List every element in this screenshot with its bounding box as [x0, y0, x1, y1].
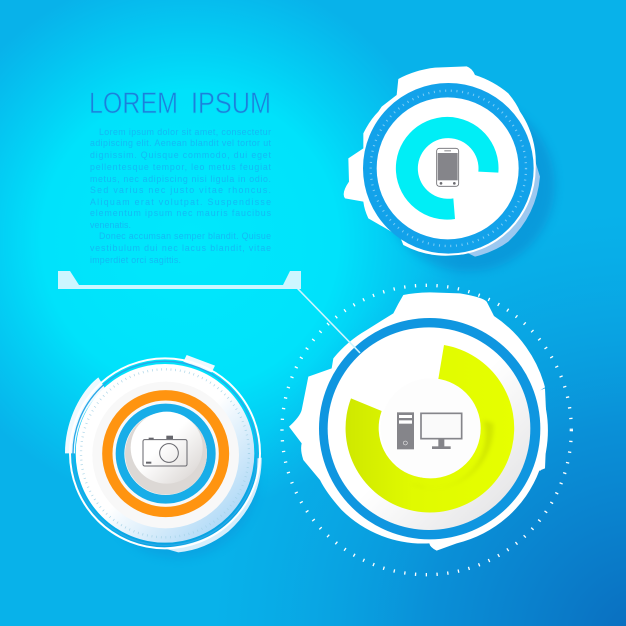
- green arc: [346, 345, 514, 512]
- title: IPSUM: [191, 87, 271, 120]
- blue ring: [319, 318, 540, 539]
- white disc: [377, 97, 519, 239]
- tick ring: [81, 369, 249, 537]
- right flange: [539, 388, 546, 471]
- blue ring: [363, 83, 534, 254]
- body text: dignissim. Quisque commodo, dui eget: [90, 150, 272, 160]
- tick ring: [282, 285, 571, 575]
- title: [89, 87, 271, 120]
- shadow: [382, 98, 555, 272]
- body text: Lorem ipsum dolor sit amet, consectetur: [99, 127, 271, 137]
- body text: [90, 127, 272, 265]
- icon: monitor: [421, 413, 462, 449]
- body text: venenatis.: [90, 220, 131, 230]
- body text: Sed varius nec justo vitae rhoncus.: [90, 185, 271, 195]
- body text: Donec accumsan semper blandit. Quisue: [99, 231, 271, 241]
- blue inner ring: [120, 408, 211, 499]
- white disc: [328, 327, 530, 530]
- icon: computer tower: [397, 412, 414, 449]
- body text: imperdiet orci sagittis.: [90, 255, 181, 265]
- body text: vestibulum dui nec lacus blandit, vitae: [90, 243, 271, 253]
- orange ring: [107, 395, 224, 512]
- body text: metus, nec adipiscing nisi ligula in odio.: [90, 174, 271, 184]
- body text: adipiscing elit. Aenean blandit vel tortor ut: [90, 138, 272, 148]
- gear pale crescent: [465, 158, 540, 257]
- outer disc: [76, 364, 254, 543]
- gear outline: [289, 292, 548, 551]
- connector line: [58, 271, 361, 354]
- inner disc: [381, 378, 481, 478]
- panel: phone gauge: [344, 66, 555, 272]
- panel: computer gauge: [282, 285, 571, 575]
- body text: elementum ipsum nec mauris faucibus: [90, 208, 272, 218]
- body text: pellentesque tempor, leo metus feugiat: [90, 162, 272, 172]
- icon: phone: [437, 148, 459, 186]
- body text: Aliquam erat volutpat. Suspendisse: [90, 197, 271, 207]
- tick ring: [371, 91, 526, 246]
- panel: camera gauge: [65, 355, 262, 558]
- cyan arc: [396, 117, 499, 220]
- thin blue ring: [73, 361, 257, 545]
- knob: [125, 413, 207, 495]
- icon: camera: [143, 436, 187, 466]
- raised disc: [92, 382, 239, 528]
- inner shadow: [410, 420, 493, 488]
- gear outline: [344, 66, 536, 256]
- outer tabs: [65, 355, 262, 552]
- title: LOREM: [89, 87, 178, 120]
- outer ring: [70, 358, 260, 548]
- shadow: [98, 398, 258, 558]
